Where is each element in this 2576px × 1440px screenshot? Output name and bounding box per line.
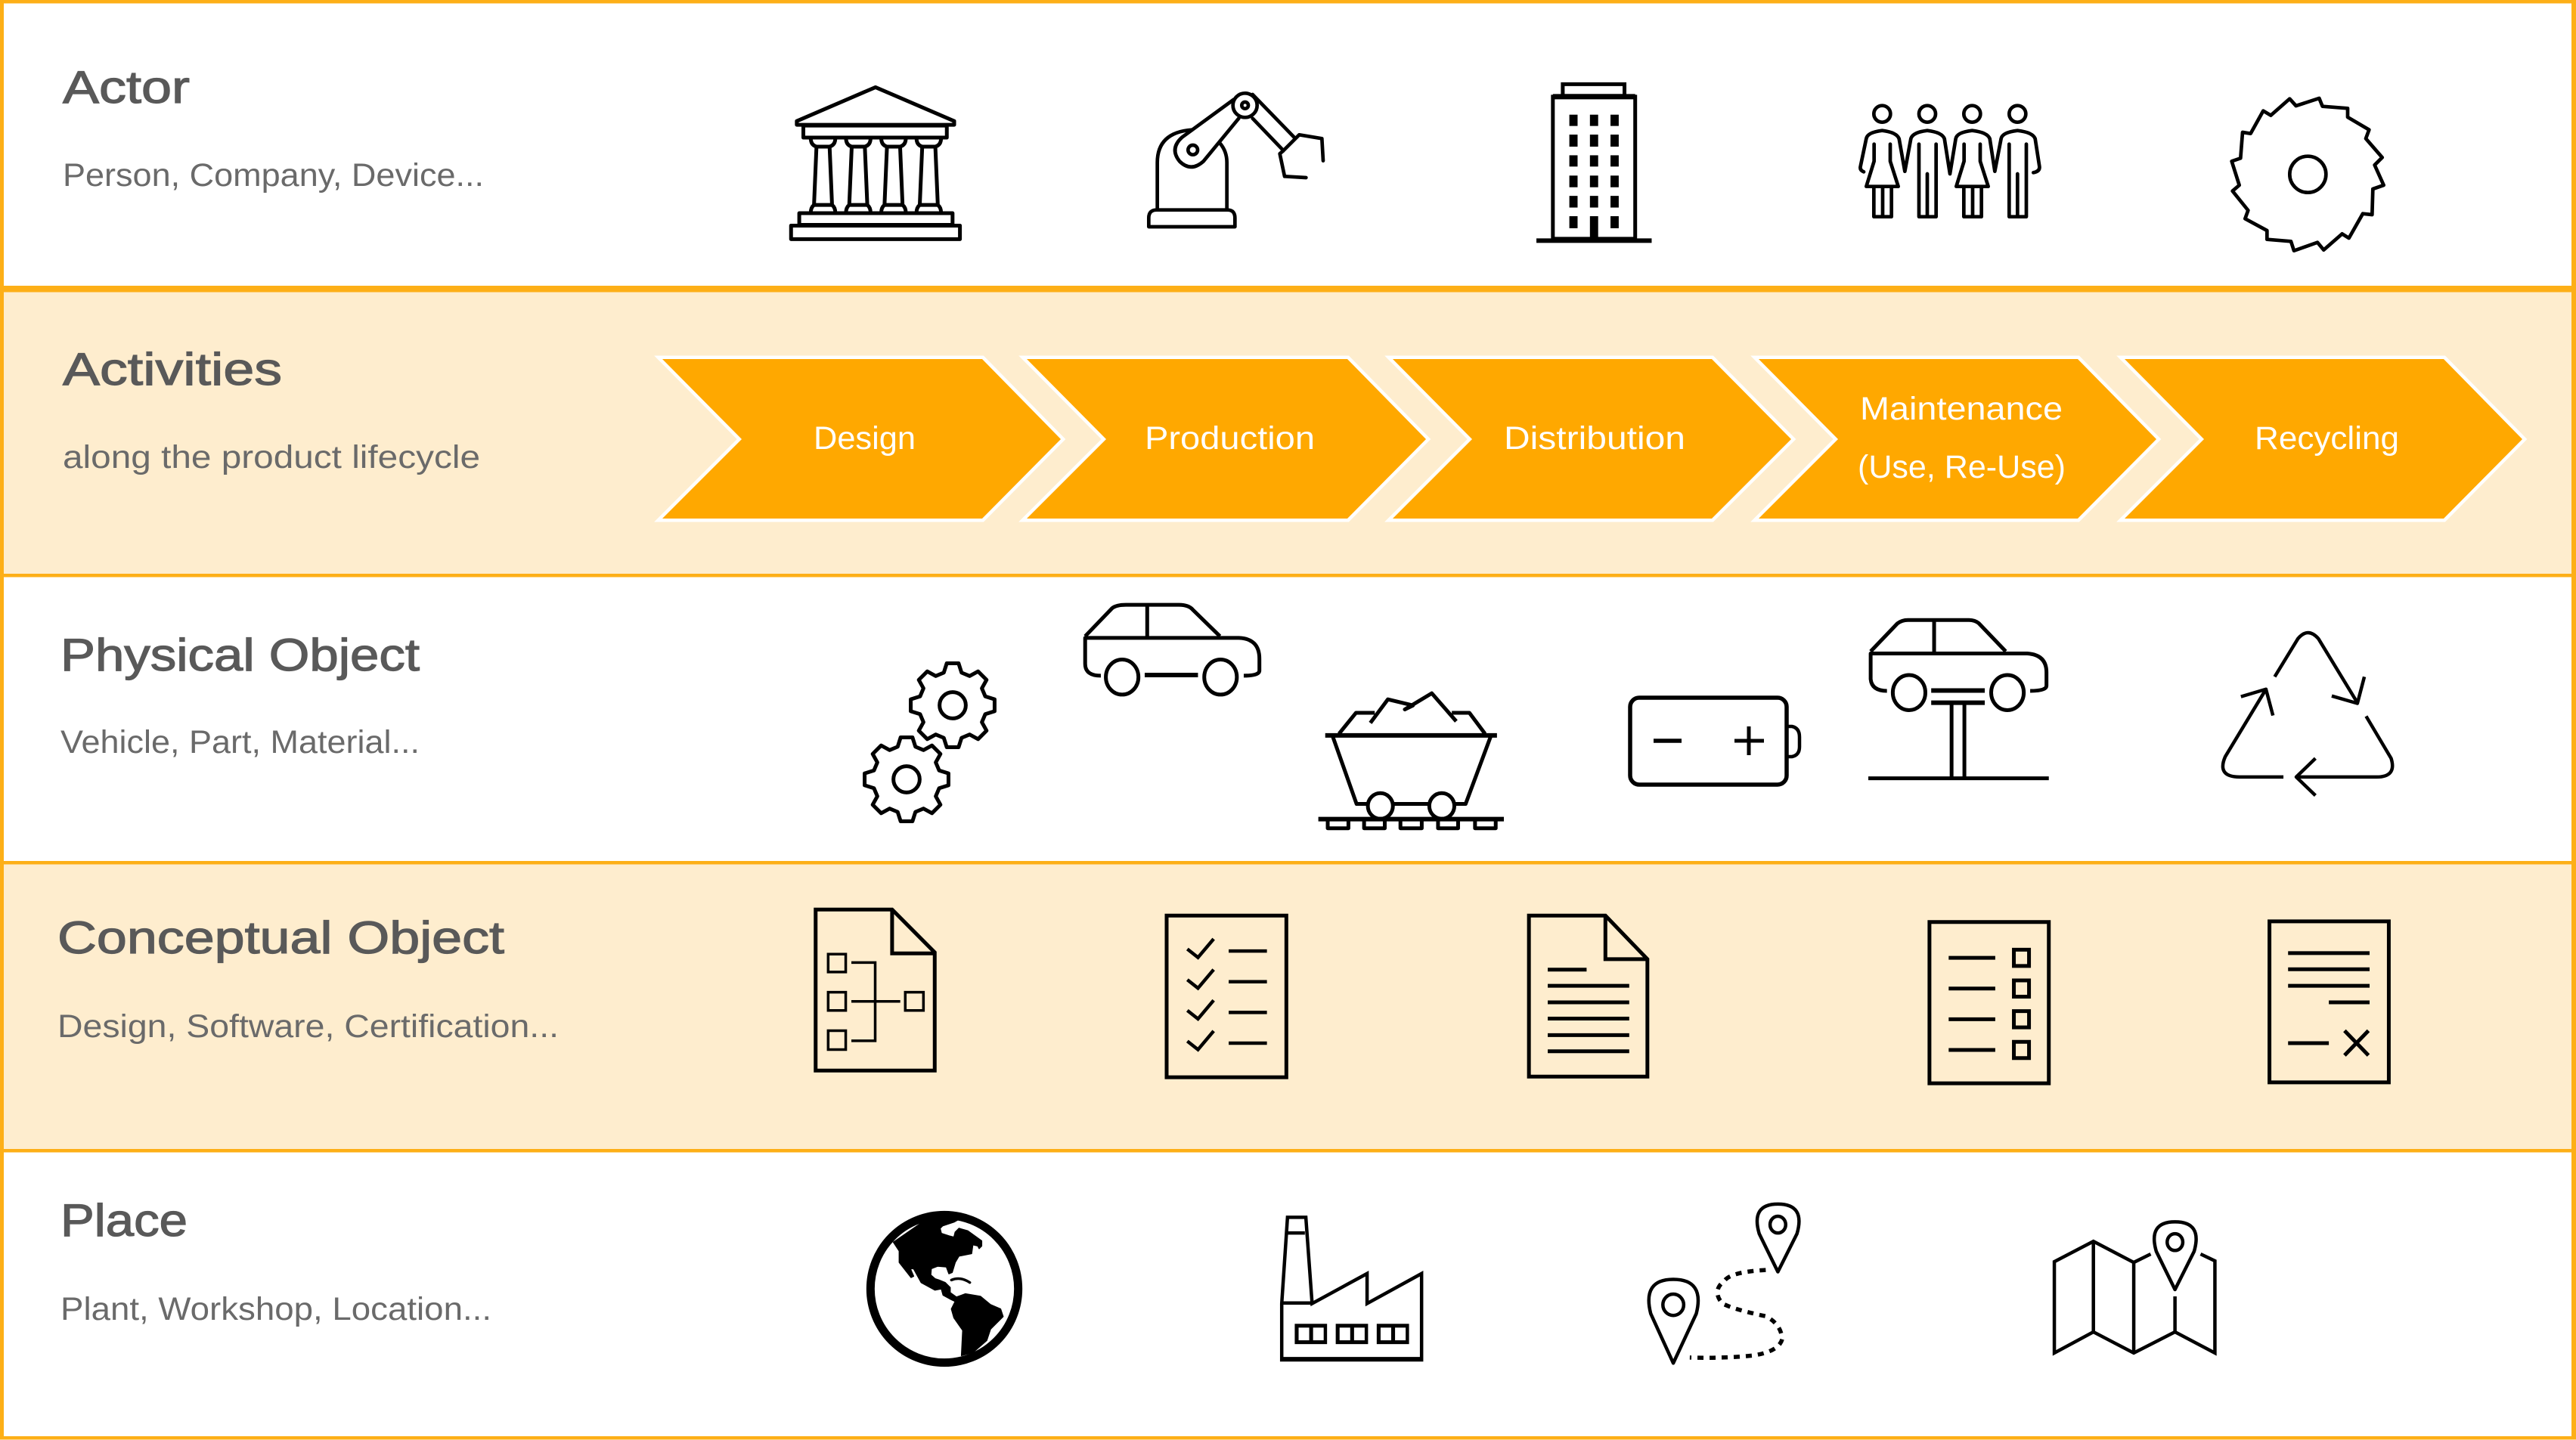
icon: office tower bbox=[1536, 84, 1651, 243]
chevron: maintenance: (Use, Re-Use) bbox=[1858, 449, 2066, 485]
icon: car on lift bbox=[1868, 620, 2049, 779]
panel: activities bbox=[0, 292, 2576, 574]
chevron: distribution: Distribution bbox=[1504, 420, 1685, 457]
panel: place bbox=[0, 1152, 2576, 1436]
chevron: design: Design bbox=[814, 420, 916, 457]
chevron: design bbox=[662, 359, 1061, 519]
icon: document with flowchart bbox=[816, 909, 935, 1070]
icon: pair of gears bbox=[865, 664, 994, 821]
icon: classical bank building bbox=[791, 87, 960, 239]
icon: robot arm bbox=[1149, 93, 1323, 227]
icon: battery bbox=[1630, 698, 1799, 785]
icon: checklist bbox=[1167, 915, 1286, 1077]
panel: actor bbox=[0, 0, 2576, 289]
text: activities description: along the product lifecycle bbox=[63, 439, 480, 475]
icon: contract document with signature cross bbox=[2270, 921, 2388, 1082]
icon: mine cart with ore bbox=[1319, 693, 1504, 828]
text: physical object examples: Vehicle, Part, Material... bbox=[60, 724, 420, 760]
chevron: distribution bbox=[1393, 359, 1791, 519]
icon: route between two location pins bbox=[1649, 1204, 1799, 1363]
icon: list with checkboxes bbox=[1930, 922, 2049, 1083]
panel: physical object bbox=[0, 577, 2576, 861]
icon: recycling triangle bbox=[2223, 633, 2392, 795]
icon: text document bbox=[1529, 915, 1648, 1076]
icon: group of four people bbox=[1860, 106, 2039, 217]
text: place examples: Plant, Workshop, Location... bbox=[60, 1291, 491, 1327]
icon: folded map with pin bbox=[2054, 1222, 2215, 1353]
chevron: production bbox=[1027, 359, 1426, 519]
chevron: recycling: Recycling bbox=[2255, 420, 2399, 457]
heading: physical object: Physical Object bbox=[60, 630, 420, 680]
text: conceptual object examples: Design, Software, Certification... bbox=[57, 1008, 559, 1045]
chevron: production: Production bbox=[1145, 420, 1315, 457]
text: actor examples: Person, Company, Device... bbox=[63, 157, 484, 194]
icon: globe bbox=[870, 1215, 1018, 1363]
heading: place: Place bbox=[60, 1195, 188, 1246]
icon: saw blade bbox=[2232, 98, 2384, 251]
icon: car bbox=[1085, 605, 1260, 695]
heading: conceptual object: Conceptual Object bbox=[57, 912, 504, 963]
chevron: recycling bbox=[2125, 359, 2522, 519]
chevron: maintenance: Maintenance bbox=[1860, 391, 2063, 427]
heading: actor: Actor bbox=[63, 62, 190, 113]
icon: factory bbox=[1282, 1217, 1421, 1360]
heading: activities: Activities bbox=[63, 344, 282, 395]
panel: conceptual object bbox=[0, 864, 2576, 1149]
chevron: maintenance bbox=[1759, 359, 2156, 519]
